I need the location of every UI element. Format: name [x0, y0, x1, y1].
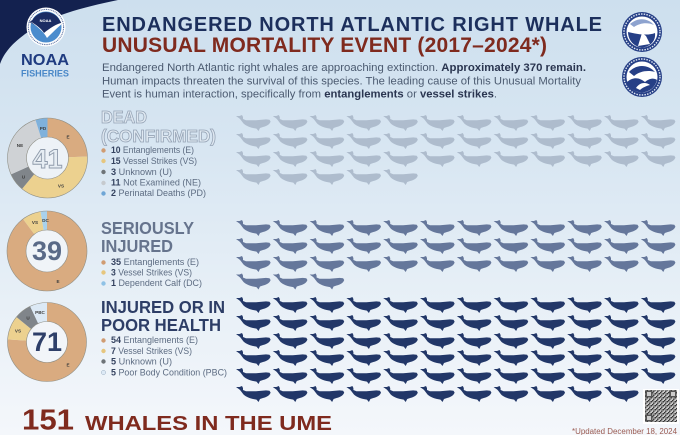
- legend: seriously injured: 1 Dependent Calf (DC): [111, 278, 202, 288]
- whale grid: 41 dead: [236, 115, 675, 185]
- intro text: Human impacts threaten the survival of this species. The leading cause of this Unusual Mortality: [102, 76, 582, 88]
- panel: dead confirmed: [8, 107, 675, 198]
- legend: dead: 15 Vessel Strikes (VS): [111, 156, 197, 166]
- legend: dead: 11 Not Examined (NE): [111, 178, 201, 188]
- panel: injured or in poor health: [8, 297, 675, 402]
- donut chart: injured or poor health: 71: [32, 327, 62, 357]
- heading: seriously injured: [101, 218, 194, 256]
- whale grid: 39 seriously injured: [236, 220, 675, 290]
- heading: dead confirmed: (CONFIRMED): [101, 126, 216, 146]
- donut chart: seriously injured: E: [56, 279, 60, 284]
- heading: seriously injured: INJURED: [101, 236, 173, 256]
- legend: injured or poor health: 7 Vessel Strikes (VS): [111, 346, 192, 356]
- whale grid: 71 injured or poor health: [236, 297, 675, 402]
- donut chart: seriously injured: [7, 211, 87, 291]
- legend: seriously injured: [101, 257, 202, 288]
- wordmark FISHERIES: FISHERIES: [21, 68, 69, 80]
- title line 1: ENDANGERED NORTH ATLANTIC RIGHT WHALE: [102, 14, 602, 36]
- wordmark NOAA: NOAA: [21, 52, 69, 69]
- legend: dead: 10 Entanglements (E): [111, 145, 194, 155]
- legend: dead: 3 Unknown (U): [111, 167, 172, 177]
- legend: dead: [101, 145, 206, 198]
- icon: NOAA emblem: NOAA: [40, 18, 51, 23]
- donut chart: seriously injured: 39: [32, 236, 62, 266]
- total: 151 whales: WHALES IN THE UME: [85, 413, 332, 435]
- title line 2: UNUSUAL MORTALITY EVENT (2017–2024*): [102, 34, 547, 57]
- heading: seriously injured: SERIOUSLY: [101, 218, 194, 238]
- navy corner swoosh: [0, 0, 118, 64]
- donut chart: injured or poor health: VS: [15, 328, 21, 334]
- legend: injured or poor health: 5 Unknown (U): [111, 356, 172, 366]
- legend: seriously injured: 35 Entanglements (E): [111, 257, 199, 267]
- donut chart: injured or poor health: PBC: [35, 310, 46, 315]
- legend: dead: 2 Perinatal Deaths (PD): [111, 188, 206, 198]
- donut chart: seriously injured: VS: [32, 220, 38, 225]
- intro text: Event is human interaction, specifically from entanglements or vessel strikes .: [102, 88, 497, 100]
- icon: marine mammal stranding emblem: [622, 57, 662, 97]
- icon: marine mammal health emblem: [622, 12, 662, 52]
- heading: injured or in poor health: [101, 297, 225, 335]
- total: 151 whales: [22, 404, 332, 435]
- donut chart: dead: U: [22, 174, 26, 180]
- NOAA Fisheries logo: [21, 8, 69, 80]
- heading: injured or in poor health: POOR HEALTH: [101, 315, 221, 335]
- donut chart: injured or poor health: U: [26, 316, 30, 320]
- donut chart: seriously injured: DC: [42, 218, 49, 223]
- donut chart: dead: NE: [17, 143, 23, 148]
- donut chart: injured or poor health: E: [66, 362, 70, 368]
- panel: seriously injured: [7, 211, 675, 291]
- legend: injured or poor health: [101, 335, 227, 378]
- donut chart: dead: PD: [40, 126, 47, 131]
- donut chart: dead: E: [66, 134, 70, 140]
- donut chart: injured or poor health: [8, 302, 86, 382]
- donut chart: dead: VS: [58, 184, 64, 188]
- heading: dead confirmed: [101, 107, 216, 146]
- legend: seriously injured: 3 Vessel Strikes (VS): [111, 268, 192, 278]
- heading: dead confirmed: DEAD: [101, 107, 147, 127]
- legend: injured or poor health: 5 Poor Body Condition (PBC): [111, 368, 227, 378]
- QR code: [643, 389, 679, 424]
- heading: injured or in poor health: INJURED OR IN: [101, 297, 225, 317]
- intro text: [102, 62, 586, 100]
- donut chart: dead: [8, 118, 88, 198]
- legend: injured or poor health: 54 Entanglements (E): [111, 335, 198, 345]
- donut chart: dead: 41: [32, 144, 63, 174]
- intro text: Endangered North Atlantic right whales are approaching extinction. Approximately 370 remain.: [102, 62, 586, 74]
